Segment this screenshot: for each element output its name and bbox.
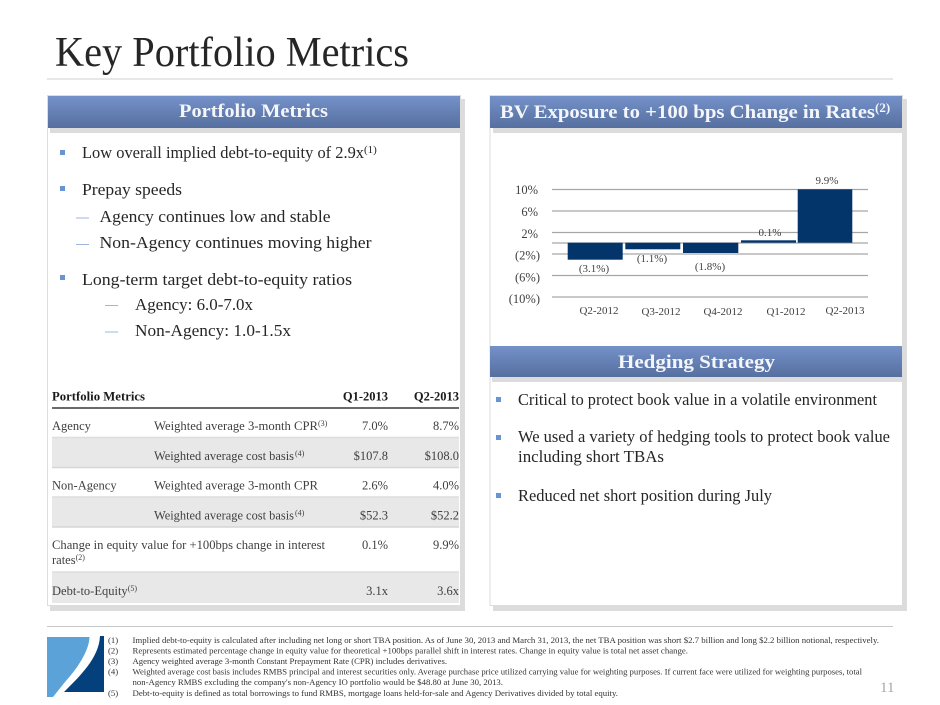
bar chart: BV exposure [509,175,868,318]
footnotes: Implied debt-to-equity is calculated after including net long or short TBA position. As of June 30, 2013 and March 31, 2013, the net TBA position was short $2.7 billion and long $2.2 billion notional, respectively. [132,635,879,645]
bar chart: BV exposure: (3.1%) [579,263,609,275]
bullet list: hedging strategy [496,390,890,505]
footnotes [108,635,879,698]
footnotes: Weighted average cost basis includes RMBS principal and interest securities only. Average purchase price utilized carrying value for weighting purposes. If current face were utilized for weighting purposes, total [132,666,863,676]
table: portfolio metrics: 0.1% [362,538,388,552]
heading: BV exposure: BV Exposure to +100 bps Change in Rates [500,102,875,123]
footnotes: Represents estimated percentage change in equity value for theoretical +100bps parallel shift in interest rates. Change in equity value is total net asset change. [132,646,688,656]
bar chart: BV exposure: 2% [521,227,538,241]
bar chart: BV exposure: Q4-2012 [703,306,743,318]
bar chart: BV exposure: Q2-2013 [825,305,865,317]
table: portfolio metrics: $108.0 [425,449,459,463]
heading: BV exposure [490,96,902,133]
table: portfolio metrics: $52.3 [360,508,388,522]
table: portfolio metrics: Q2-2013 [414,390,459,404]
bullet list: portfolio metrics: (1) [364,144,377,156]
table: portfolio metrics [52,390,460,603]
bar chart: BV exposure: (6%) [515,270,540,284]
table: portfolio metrics: Non-Agency [52,478,117,492]
table: portfolio metrics: Weighted average 3-month CPR [154,419,319,433]
bar chart: BV exposure: (2%) [515,248,540,262]
page number: 11 [880,680,894,696]
table: portfolio metrics: $52.2 [431,508,459,522]
table: portfolio metrics: 4.0% [433,478,459,492]
bullet list: hedging strategy: Critical to protect book value in a volatile environment [518,390,877,409]
bullet list: hedging strategy: We used a variety of hedging tools to protect book value [518,427,890,446]
table: portfolio metrics: Change in equity value for +100bps change in interest [52,538,326,552]
table: portfolio metrics: Debt-to-Equity [52,584,128,598]
bar chart: BV exposure: 0.1% [759,227,781,239]
table: portfolio metrics: 9.9% [433,538,459,552]
table: portfolio metrics: $107.8 [354,449,388,463]
table: portfolio metrics: (4) [295,449,305,458]
bullet list: portfolio metrics: Long-term target debt-to-equity ratios [82,270,352,289]
bar chart: BV exposure: 10% [515,183,538,197]
bullet list: hedging strategy: including short TBAs [518,447,664,466]
table: portfolio metrics: Portfolio Metrics [52,390,145,404]
bullet list: portfolio metrics: Agency continues low and stable [100,207,330,226]
heading: portfolio metrics: Portfolio Metrics [179,101,328,122]
table: portfolio metrics: Weighted average cost basis [154,508,294,522]
footnotes: (4) [108,666,118,676]
bar chart: BV exposure: (10%) [509,292,540,306]
bar chart: BV exposure: 9.9% [816,175,838,187]
table: portfolio metrics: 3.1x [366,584,389,598]
table: portfolio metrics: 7.0% [362,419,388,433]
footnotes: Debt-to-equity is defined as total borrowings to fund RMBS, mortgage loans held-for-sale and Agency Derivatives divided by total equity. [132,688,618,698]
footnotes: non-Agency RMBS excluding the company's non-Agency IO portfolio would be $48.80 at June 30, 2013. [132,677,503,687]
footnotes: (3) [108,656,118,666]
footnotes: Agency weighted average 3-month Constant Prepayment Rate (CPR) includes derivatives. [132,656,447,666]
footnotes: (1) [108,635,118,645]
bar chart: BV exposure: (1.8%) [695,261,725,273]
table: portfolio metrics: 3.6x [437,584,460,598]
panel: portfolio metrics [48,96,465,611]
icon: company logo [47,636,104,697]
heading: portfolio metrics [48,96,461,133]
table: portfolio metrics: (5) [128,584,137,593]
heading: hedging strategy [490,346,902,382]
table: portfolio metrics: rates [52,553,76,567]
table: portfolio metrics: 2.6% [362,478,388,492]
table: portfolio metrics: 8.7% [433,419,459,433]
bullet list: portfolio metrics: Agency: 6.0-7.0x [135,295,253,314]
table: portfolio metrics: Weighted average 3-month CPR [154,478,319,492]
bar chart: BV exposure: Q3-2012 [641,306,681,318]
bullet list: portfolio metrics: Low overall implied debt-to-equity of 2.9x [82,143,364,162]
table: portfolio metrics: (2) [76,553,85,562]
bullet list: portfolio metrics: Prepay speeds [82,180,182,199]
table: portfolio metrics: Q1-2013 [343,390,388,404]
bar chart: BV exposure: 6% [521,205,538,219]
panel: BV exposure [490,96,907,611]
table: portfolio metrics: (4) [295,508,305,518]
heading: BV exposure: (2) [875,100,890,115]
bullet list: portfolio metrics [60,143,377,340]
bar chart: BV exposure: Q1-2012 [766,306,806,318]
title: Key Portfolio Metrics [55,30,409,76]
footnotes: (5) [108,688,118,698]
bullet list: portfolio metrics: Non-Agency: 1.0-1.5x [135,321,291,340]
bar chart: BV exposure: (1.1%) [637,253,667,265]
footnotes: (2) [108,646,118,656]
heading: hedging strategy: Hedging Strategy [618,352,776,373]
bullet list: portfolio metrics: Non-Agency continues moving higher [100,233,372,252]
table: portfolio metrics: Weighted average cost basis [154,449,294,463]
bullet list: hedging strategy: Reduced net short position during July [518,486,772,505]
table: portfolio metrics: Agency [52,419,92,433]
bar chart: BV exposure: Q2-2012 [579,305,619,317]
table: portfolio metrics: (3) [318,419,328,428]
